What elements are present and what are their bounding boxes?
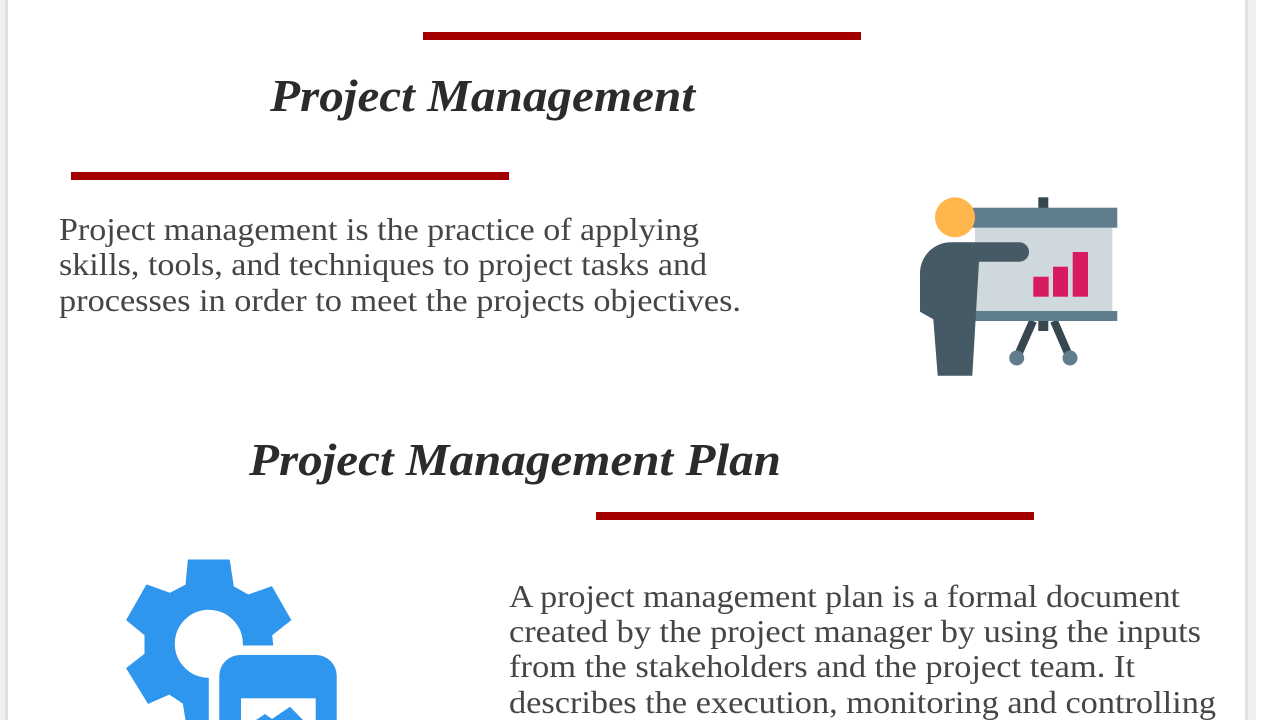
text block: project management definition: Project management is the practice of applying <box>59 211 699 247</box>
icon: presenter with chart board <box>920 197 1117 376</box>
text block: project management plan definition <box>509 578 1216 720</box>
text block: project management plan definition: A project management plan is a formal document <box>509 578 1180 614</box>
heading: Project Management Plan: Project Management Plan <box>248 434 781 485</box>
text block: project management definition: skills, tools, and techniques to project tasks and <box>59 246 707 282</box>
text block: project management plan definition: created by the project manager by using the inputs <box>509 613 1201 649</box>
text block: project management definition <box>59 211 741 318</box>
heading: Project Management: Project Management <box>269 70 696 121</box>
text block: project management plan definition: from the stakeholders and the project team. It <box>509 648 1135 684</box>
text block: project management definition: processes in order to meet the projects objectives. <box>59 282 741 318</box>
text block: project management plan definition: describes the execution, monitoring and controlling <box>509 684 1216 720</box>
icon: gear with tablet <box>127 560 337 720</box>
